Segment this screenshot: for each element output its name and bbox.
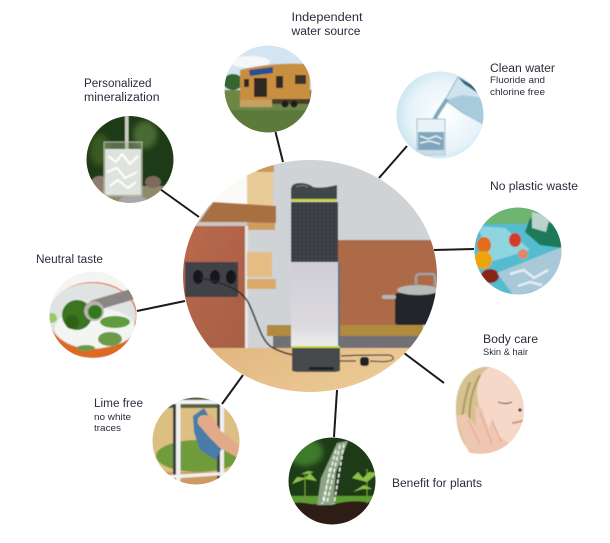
label: Clean water bbox=[490, 63, 555, 75]
photo: hand cleaning a window bbox=[150, 396, 242, 486]
cable plug bbox=[360, 357, 369, 366]
label: Skin & hair bbox=[483, 347, 528, 358]
cable on table bbox=[340, 355, 393, 362]
label bbox=[290, 12, 363, 38]
label: water source bbox=[290, 26, 360, 38]
panel: personalized mineralization bbox=[84, 78, 177, 206]
panel: clean water bbox=[395, 63, 555, 160]
connector: no plastic waste bbox=[434, 249, 474, 250]
panel: benefit for plants bbox=[287, 436, 482, 528]
connector: lime free bbox=[222, 375, 243, 404]
connector: neutral taste bbox=[137, 301, 185, 311]
label: Body care bbox=[483, 334, 538, 346]
bottle bbox=[291, 183, 340, 372]
power cable bbox=[200, 278, 293, 355]
label: No plastic waste bbox=[490, 181, 578, 193]
label: Independent bbox=[292, 12, 363, 24]
label: no white bbox=[94, 412, 131, 423]
photo: broccoli in boiling pot bbox=[47, 270, 140, 360]
photo: tiny house on meadow bbox=[223, 45, 314, 135]
connector: benefit for plants bbox=[334, 390, 337, 437]
panel: body care bbox=[455, 334, 538, 454]
panel: neutral taste bbox=[36, 254, 140, 360]
connector: personalized mineralization bbox=[160, 189, 199, 217]
photo: woman touching face bbox=[455, 366, 524, 454]
panel: independent water source bbox=[223, 12, 363, 135]
label bbox=[490, 63, 555, 98]
label bbox=[84, 78, 160, 104]
photo: water poured from jug into glass bbox=[395, 70, 485, 160]
label bbox=[94, 398, 143, 434]
label: chlorine free bbox=[490, 87, 545, 98]
connector: body care bbox=[404, 353, 444, 383]
label: Fluoride and bbox=[490, 75, 545, 86]
label: Neutral taste bbox=[36, 254, 103, 266]
connector: independent water source bbox=[276, 132, 283, 162]
label: Benefit for plants bbox=[392, 478, 482, 490]
panel: central kitchen photo with bottle bbox=[180, 155, 440, 395]
panel: no plastic waste bbox=[473, 181, 578, 298]
label: Lime free bbox=[94, 398, 143, 410]
panel: lime free bbox=[94, 396, 242, 486]
label: Personalized bbox=[84, 78, 152, 90]
photo: watering seedlings bbox=[288, 438, 376, 524]
connector: clean water bbox=[379, 146, 407, 178]
icon: wall socket bbox=[185, 262, 238, 297]
label: traces bbox=[94, 423, 121, 434]
label: mineralization bbox=[84, 92, 160, 104]
photo: plastic bottles bbox=[474, 208, 562, 294]
label bbox=[483, 334, 538, 358]
icon: pot bbox=[382, 274, 439, 325]
photo: water pouring into glass bbox=[85, 115, 177, 206]
